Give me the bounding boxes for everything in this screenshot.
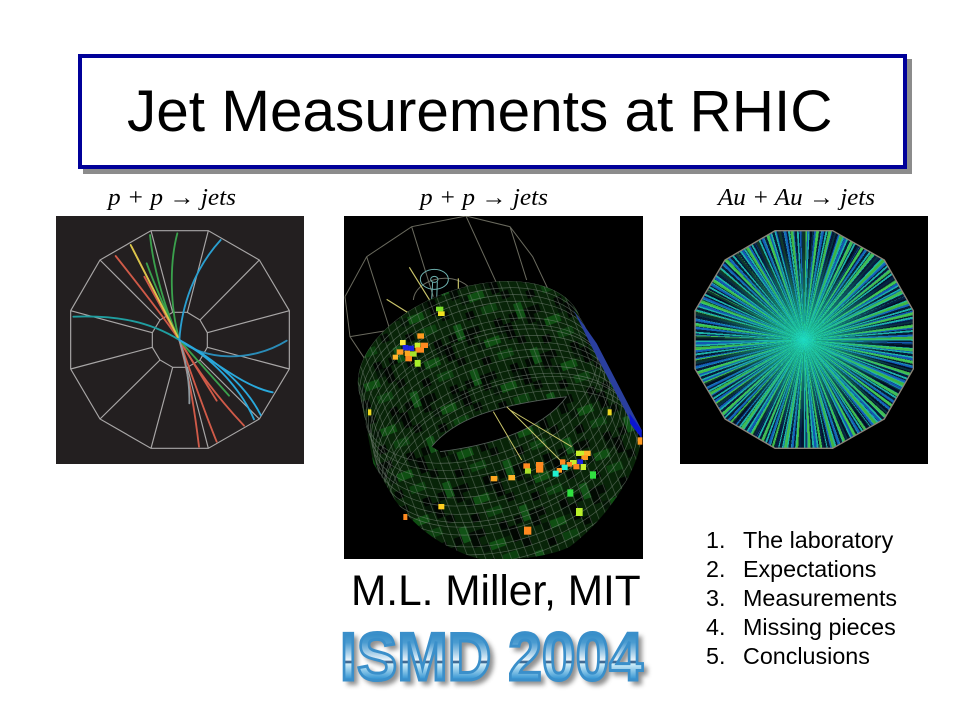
far-side tracks	[387, 267, 458, 315]
decagon outline	[694, 230, 914, 449]
author: M.L. Miller, MIT	[351, 567, 641, 614]
hot calorimeter cells	[368, 307, 642, 535]
track fan	[696, 231, 913, 448]
agenda list: 1.	[706, 527, 725, 553]
near-side tracks	[493, 407, 572, 460]
agenda list: Missing pieces	[743, 614, 896, 640]
agenda list: The laboratory	[743, 527, 893, 553]
formula: p+p to jets, left: p + p → jets	[106, 185, 236, 211]
agenda list	[706, 527, 897, 669]
formula: Au+Au to jets, right: Au + Au → jets	[716, 185, 875, 211]
agenda list: 3.	[706, 585, 725, 611]
title box	[78, 54, 907, 169]
blue edge strip	[573, 310, 642, 438]
title: Jet Measurements at RHIC	[127, 79, 832, 144]
agenda list: Measurements	[743, 585, 897, 611]
wireframe of outer detector	[345, 216, 550, 367]
agenda list: Expectations	[743, 556, 876, 582]
agenda list: 2.	[706, 556, 725, 582]
see-through gap	[432, 397, 567, 452]
agenda list: Conclusions	[743, 643, 870, 669]
agenda list: 4.	[706, 614, 725, 640]
panel: Au+Au event display	[680, 216, 928, 464]
agenda list: 5.	[706, 643, 725, 669]
panel: calorimeter cylinder	[344, 216, 643, 559]
panel: p+p event display	[56, 216, 304, 464]
calorimeter barrel	[358, 281, 642, 559]
beam pipe rings	[420, 269, 448, 300]
formula: p+p to jets, centre: p + p → jets	[418, 185, 548, 211]
